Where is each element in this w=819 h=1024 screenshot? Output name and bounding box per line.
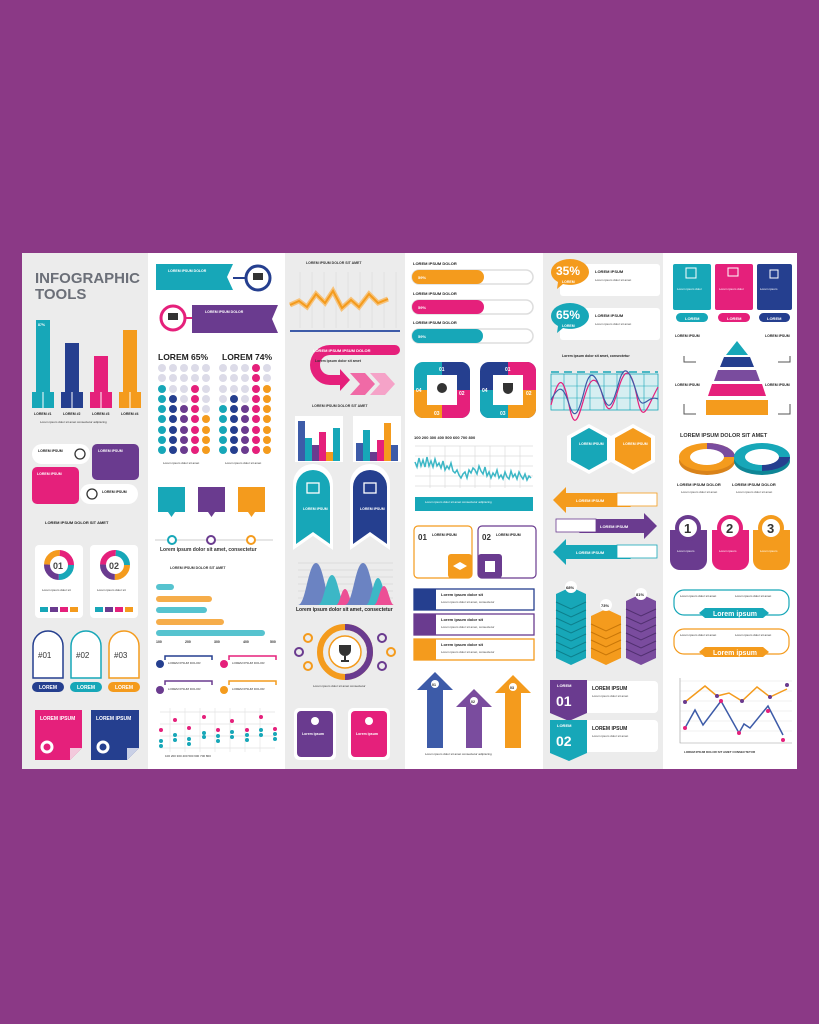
bar chart 3D: 87% [38,323,46,327]
ring cards [35,545,138,618]
timeline badges: Lorem ipsum dolor sit amet, consectetur [160,547,257,553]
callout boxes: LOREM IPSUM [102,490,127,494]
sticky notes: LOREM IPSUM [96,716,131,722]
numbered badges: Lorem ipsum [677,549,695,553]
direction arrows: LOREM IPSUM [576,550,605,555]
numbered badges [670,515,790,570]
numbered boxes: LOREM IPSUM [496,533,521,537]
bar chart 3D [32,320,141,424]
cycle diagrams: 01 [439,367,445,373]
bar chart 3D: LOREM #3 [92,412,110,416]
U arrow: LOREM IPSUM IPSUM DOLOR [313,348,371,353]
direction arrows: LOREM IPSUM [576,498,605,503]
arrows: 03 [510,686,514,690]
hexagons [567,424,655,474]
ring cards: Lorem ipsum dolor sit [42,588,71,592]
speech bubbles: Lorem ipsum dolor sit amet [595,322,631,326]
hexagons: LOREM IPSUM [579,442,604,446]
horizontal bar chart [156,566,276,644]
numbered badges: Lorem ipsum [760,549,778,553]
speech bubbles: 65% [556,308,580,322]
list rows: Lorem ipsum dolor sit [441,592,484,597]
heading: LOREM IPSUM DOLOR SIT AMET [680,433,768,439]
cycle diagrams: 03 [434,411,440,417]
dot plot [159,708,277,758]
bookmarks: LOREM IPSUM [303,507,328,511]
progress bars: LOREM IPSUM DOLOR [413,261,457,266]
cycle diagrams: 01 [505,367,511,373]
progress bars: LOREM IPSUM DOLOR [413,291,457,296]
tombstone tags: LOREM [77,685,95,691]
donuts: LOREM IPSUM DOLOR [677,482,721,487]
dot grids [158,352,273,465]
numbered boxes [414,526,536,578]
numbered boxes: 02 [482,533,491,542]
wave chart [551,354,658,420]
wave chart: Lorem ipsum dolor sit amet, consectetur [562,354,630,358]
progress bars: LOREM IPSUM DOLOR [413,320,457,325]
tombstone tags: #03 [114,651,128,660]
speech bubbles: LOREM IPSUM [595,313,624,318]
3D stacks: 73% [601,603,609,608]
progress bars [412,261,533,343]
direction arrows [553,487,657,565]
pyramid: LOREM IPSUM [765,334,790,338]
bracket labels [674,590,789,657]
dot grids: Lorem ipsum dolor sit amet [163,461,199,465]
top cards: LOREM [685,316,700,321]
ribbons [156,264,278,333]
bracket list: LOREM IPSUM DOLOR [168,687,201,691]
cycle diagrams: 04 [482,388,488,394]
horizontal bar chart: 100 [156,640,162,644]
tombstone tags: #01 [38,651,52,660]
panel: column 2 [155,264,278,758]
bar chart 3D: LOREM #4 [121,412,139,416]
area chart: Lorem ipsum dolor sit amet, consectetur [296,607,393,613]
arrows: Lorem ipsum dolor sit amet consectetur adipiscing [425,752,492,756]
tombstone tags: LOREM [39,685,57,691]
3D stacks: 81% [636,592,644,597]
ribbons: LOREM IPSUM DOLOR [168,269,207,273]
trophy ring: Lorem ipsum dolor sit amet consectetur [313,684,366,688]
bracket labels: Lorem ipsum [713,611,757,618]
top cards: LOREM [767,316,782,321]
numbered shields: 01 [556,693,572,709]
line chart: LOREM IPSUM DOLOR SIT AMET CONSECTETUR [684,750,756,754]
callout boxes [32,444,139,504]
bar chart 3D: LOREM #2 [63,412,81,416]
panel: column 4 [412,261,536,756]
horizontal bar chart: LOREM IPSUM DOLOR SIT AMET [170,566,226,570]
tombstone tags [32,631,140,692]
donuts [677,443,790,494]
speech bubbles: LOREM [562,280,575,284]
bracket list: LOREM IPSUM DOLOR [168,661,201,665]
list rows: Lorem ipsum dolor sit [441,642,484,647]
ribbons: LOREM IPSUM DOLOR [205,310,244,314]
noise line chart: Lorem ipsum dolor sit amet consectetur adipiscing [425,500,492,504]
dot grids: Lorem ipsum dolor sit amet [225,461,261,465]
dot grids: LOREM 74% [222,352,273,362]
ring cards: Lorem ipsum dolor sit [97,588,126,592]
trophy ring [295,627,395,688]
dot plot: 100 200 300 400 500 600 700 800 [165,754,211,758]
noise line chart: 100 200 300 400 500 600 700 800 [414,435,476,440]
panel: column 3 [290,261,401,760]
numbered shields: LOREM IPSUM [592,726,627,732]
panel: column 1 [32,270,141,760]
list rows: Lorem ipsum dolor sit amet, consectetur [441,600,494,604]
cycle diagrams: 02 [459,391,465,397]
bookmarks [293,464,390,550]
speech bubbles: Lorem ipsum dolor sit amet [595,278,631,282]
numbered shields: 02 [556,733,572,749]
icon boxes: Lorem ipsum [302,732,324,736]
bracket list: LOREM IPSUM DOLOR [232,687,265,691]
pyramid: LOREM IPSUM [675,383,700,387]
cycle diagrams: 02 [526,391,532,397]
twin bar charts [295,404,401,462]
list rows: Lorem ipsum dolor sit amet, consectetur [441,650,494,654]
numbered shields: LOREM IPSUM [592,686,627,692]
numbered boxes: 01 [418,533,427,542]
horizontal bar chart: 200 [185,640,191,644]
callout boxes: LOREM IPSUM [38,449,63,453]
speech bubbles: LOREM IPSUM [595,269,624,274]
bracket labels: Lorem ipsum [713,650,757,657]
donuts: Lorem ipsum dolor sit amet [681,490,717,494]
title: TOOLS [35,286,86,303]
bar chart 3D: LOREM #1 [34,412,52,416]
3D stacks: 68% [566,585,574,590]
pyramid [675,334,790,415]
heading: LOREM IPSUM DOLOR SIT AMET [45,520,109,525]
numbered shields [550,680,658,761]
cycle diagrams [414,362,536,418]
bracket list [156,656,276,694]
top cards: Lorem ipsum dolor [719,287,744,291]
panel: column 5 [550,259,660,761]
top cards: Lorem ipsum [760,287,778,291]
horizontal bar chart: 300 [214,640,220,644]
sticky notes [35,710,139,760]
3D stacks [556,581,656,665]
line chart [290,261,400,331]
top cards [673,264,792,322]
callout boxes: LOREM IPSUM [37,472,62,476]
cycle diagrams: 04 [416,388,422,394]
numbered shields: LOREM [557,683,572,688]
numbered shields: Lorem ipsum dolor sit amet [592,694,628,698]
arrows: 02 [471,700,475,704]
speech bubbles: LOREM [562,324,575,328]
arrows: 01 [432,683,436,687]
progress bars: 59% [418,334,426,339]
arrows [417,672,531,756]
speech bubbles: 35% [556,264,580,278]
noise line chart [414,435,533,511]
progress bars: 59% [418,305,426,310]
numbered badges: 3 [767,521,774,536]
twin bar charts: LOREM IPSUM DOLOR SIT AMET [312,404,368,408]
list rows: Lorem ipsum dolor sit amet, consectetur [441,625,494,629]
bar chart 3D: Lorem ipsum dolor sit amet consectetur adipiscing [40,420,107,424]
horizontal bar chart: 400 [243,640,249,644]
speech bubbles [551,259,660,340]
bracket labels: Lorem ipsum dolor sit amet [735,594,771,598]
horizontal bar chart: 500 [270,640,276,644]
icon boxes [294,708,390,760]
U arrow [310,345,400,395]
ring cards: 01 [53,561,63,571]
numbered shields: Lorem ipsum dolor sit amet [592,734,628,738]
donuts: LOREM IPSUM DOLOR [732,482,776,487]
numbered boxes: LOREM IPSUM [432,533,457,537]
top cards: LOREM [727,316,742,321]
bookmarks: LOREM IPSUM [360,507,385,511]
tombstone tags: #02 [76,651,90,660]
panel: column 6 [670,264,792,754]
hexagons: LOREM IPSUM [623,442,648,446]
numbered badges: 2 [726,521,733,536]
U arrow: Lorem ipsum dolor sit amet [315,359,362,363]
title: INFOGRAPHIC [35,270,140,287]
panel: sheet background [22,253,797,769]
ring cards: 02 [109,561,119,571]
area chart [296,563,394,613]
numbered badges: 1 [684,521,691,536]
bracket labels: Lorem ipsum dolor sit amet [680,594,716,598]
cycle diagrams: 03 [500,411,506,417]
donuts: Lorem ipsum dolor sit amet [736,490,772,494]
line chart: LOREM IPSUM DOLOR SIT AMET [306,261,362,265]
icon boxes: Lorem ipsum [356,732,378,736]
bracket list: LOREM IPSUM DOLOR [232,661,265,665]
timeline badges [155,487,273,553]
progress bars: 59% [418,275,426,280]
pyramid: LOREM IPSUM [765,383,790,387]
numbered shields: LOREM [557,723,572,728]
sticky notes: LOREM IPSUM [40,716,75,722]
list rows: Lorem ipsum dolor sit [441,617,484,622]
pyramid: LOREM IPSUM [675,334,700,338]
callout boxes: LOREM IPSUM [98,449,123,453]
bracket labels: Lorem ipsum dolor sit amet [680,633,716,637]
numbered badges: Lorem ipsum [719,549,737,553]
direction arrows: LOREM IPSUM [600,524,629,529]
top cards: Lorem ipsum dolor [677,287,702,291]
line chart [680,678,792,754]
tombstone tags: LOREM [115,685,133,691]
title [35,270,140,303]
list rows [414,589,534,660]
bracket labels: Lorem ipsum dolor sit amet [735,633,771,637]
dot grids: LOREM 65% [158,352,209,362]
